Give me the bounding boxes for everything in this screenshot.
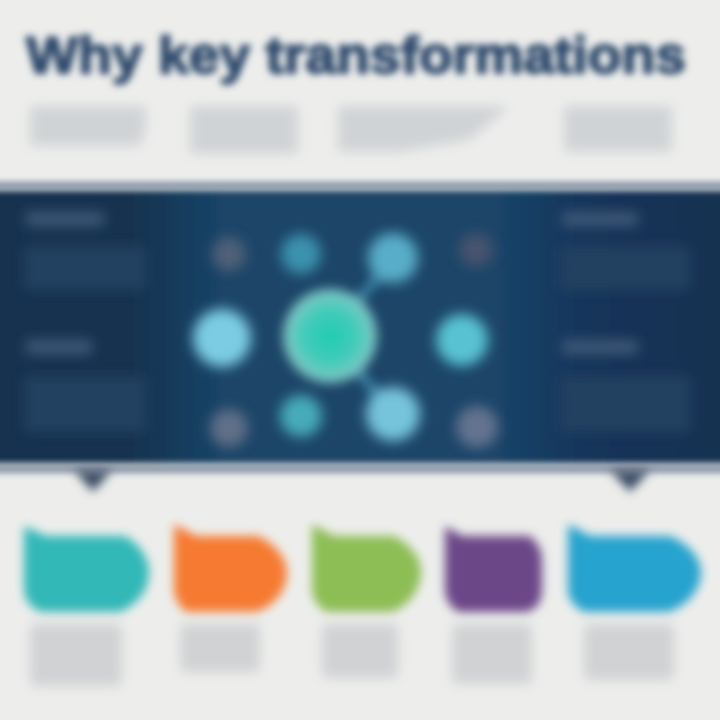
panel top edge [0, 182, 720, 189]
green tab text [322, 624, 398, 678]
tab text blocks [30, 624, 674, 686]
text block 3 [338, 106, 510, 152]
teal tab text [30, 624, 122, 686]
right text 2 [560, 376, 690, 432]
left labels [24, 212, 146, 432]
title: Why key transformations [26, 27, 686, 85]
header text blocks [30, 106, 672, 154]
network diagram [193, 233, 498, 448]
right heading 1 [562, 212, 638, 226]
node: bottom teal [280, 395, 322, 437]
left text 1 [24, 246, 146, 290]
text block 2 [190, 106, 298, 154]
left text 2 [24, 376, 146, 432]
purple tab text [452, 624, 532, 684]
blue tab text [584, 624, 674, 680]
tab: green [312, 524, 421, 612]
tab: orange [174, 524, 287, 612]
tab: purple [445, 526, 542, 612]
tab: blue [568, 524, 701, 612]
right labels [560, 212, 690, 432]
node: left blue [193, 309, 251, 367]
node: top teal [281, 234, 321, 274]
node: bottom-left grey [210, 409, 248, 447]
tab: teal [24, 526, 149, 612]
text block 4 [564, 106, 672, 152]
orange tab text [180, 624, 260, 672]
node: bottom-far-right grey [456, 406, 498, 448]
right heading 2 [562, 340, 638, 354]
node: right teal [436, 314, 488, 366]
connectors [345, 258, 394, 414]
node: central hub [283, 289, 377, 383]
pointer left [74, 470, 112, 492]
node: top-left grey [212, 237, 246, 271]
text block 1 [30, 106, 146, 146]
left heading 1 [26, 212, 104, 226]
central dark panel [0, 182, 720, 473]
node: top-right blue [368, 233, 418, 283]
node: bottom-right blue [366, 387, 420, 441]
left heading 2 [26, 340, 92, 354]
panel bottom edge [0, 465, 720, 473]
node: top-far-right grey [459, 233, 493, 267]
right text 1 [560, 246, 690, 290]
pointer right [610, 470, 650, 492]
